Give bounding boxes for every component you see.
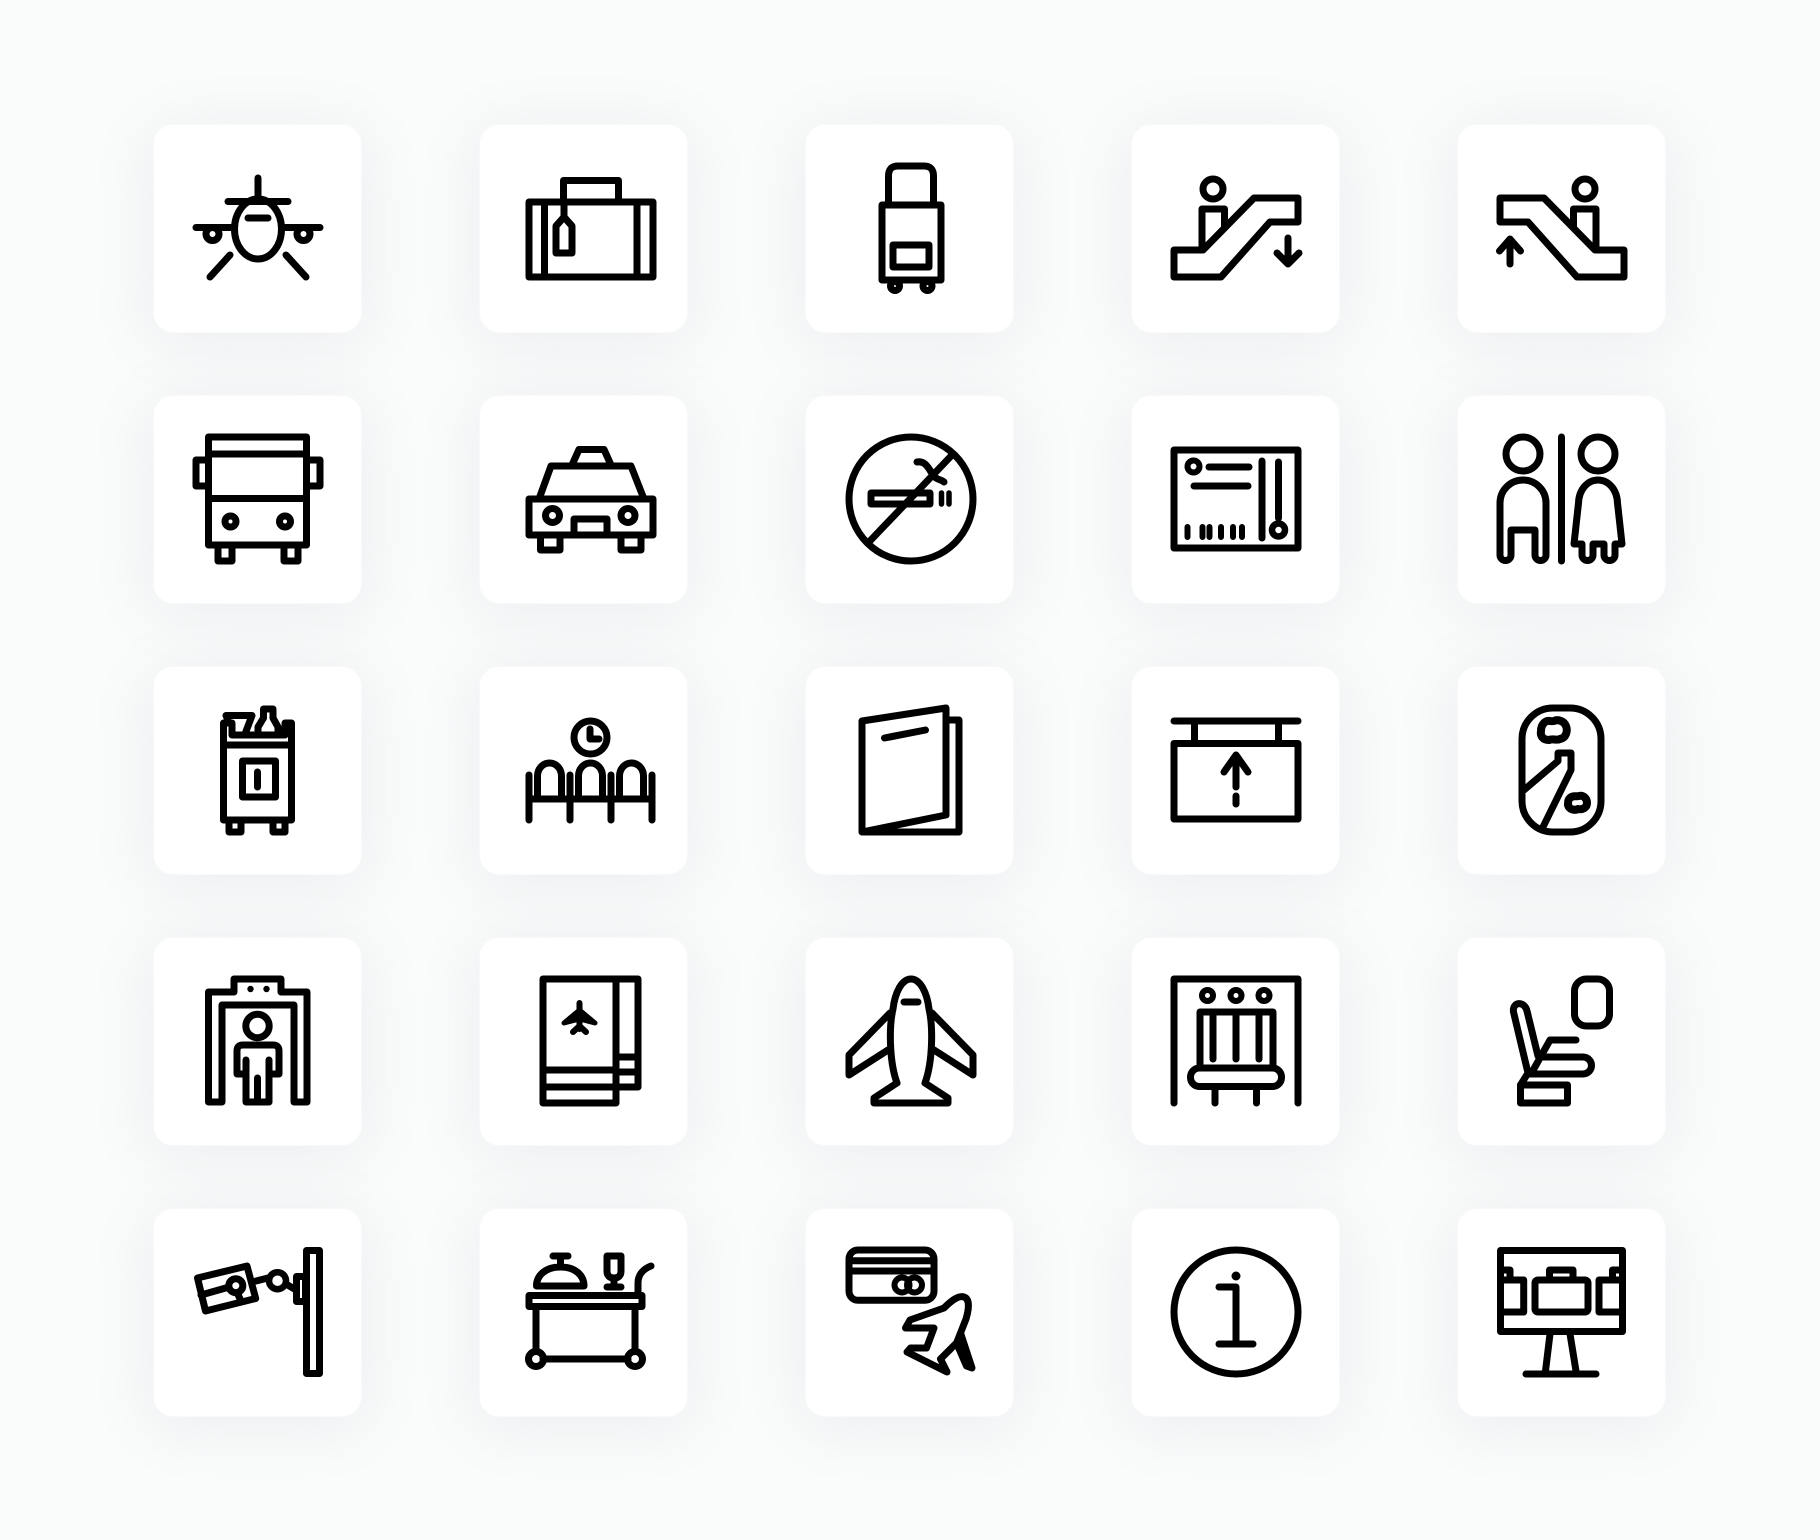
- icon: airplane top view: [846, 976, 976, 1106]
- card: trolley bag: [805, 124, 1014, 333]
- icon: credit card and plane: [846, 1246, 976, 1376]
- card: drinks cart: [153, 666, 362, 875]
- card: passport: [479, 937, 688, 1146]
- icon: plane seat: [1510, 976, 1613, 1106]
- icon: hanging direction sign: [1170, 718, 1302, 822]
- icon: baggage scanner: [1170, 976, 1302, 1106]
- card: waiting area: [479, 666, 688, 875]
- card: plane seat: [1457, 937, 1666, 1146]
- icon: passport: [540, 976, 642, 1106]
- card: plane window: [1457, 666, 1666, 875]
- card: brochure: [805, 666, 1014, 875]
- card: taxi: [479, 395, 688, 604]
- icon: escalator down: [1170, 176, 1302, 280]
- card: no smoking: [805, 395, 1014, 604]
- icon: restroom: [1496, 434, 1626, 564]
- icon: information: [1170, 1246, 1302, 1378]
- card: escalator down: [1131, 124, 1340, 333]
- icon: no smoking: [846, 434, 976, 564]
- card: baggage carousel monitor: [1457, 1208, 1666, 1417]
- icon: boarding pass: [1170, 446, 1302, 552]
- card: airplane top view: [805, 937, 1014, 1146]
- card: boarding pass: [1131, 395, 1340, 604]
- icon: waiting area: [526, 718, 656, 824]
- icon: plane window: [1518, 704, 1604, 836]
- card: bus: [153, 395, 362, 604]
- card: baggage scanner: [1131, 937, 1340, 1146]
- card: airplane front view: [153, 124, 362, 333]
- icon: security gate: [205, 976, 310, 1106]
- icon: security camera: [194, 1247, 323, 1377]
- icon: brochure: [858, 704, 962, 836]
- card: room service cart: [479, 1208, 688, 1417]
- card: suitcase with tag: [479, 124, 688, 333]
- icon: bus: [192, 434, 324, 564]
- card: security gate: [153, 937, 362, 1146]
- icon: taxi: [526, 446, 656, 554]
- icon: trolley bag: [878, 162, 944, 294]
- icon: airplane front view: [192, 174, 324, 280]
- card: information: [1131, 1208, 1340, 1417]
- card: escalator up: [1457, 124, 1666, 333]
- card: security camera: [153, 1208, 362, 1417]
- icon: suitcase with tag: [526, 177, 656, 280]
- icon: room service cart: [525, 1252, 654, 1370]
- card: hanging direction sign: [1131, 666, 1340, 875]
- card: restroom: [1457, 395, 1666, 604]
- icon: baggage carousel monitor: [1497, 1247, 1626, 1378]
- icon: drinks cart: [220, 706, 295, 836]
- card: credit card and plane ticket payment: [805, 1208, 1014, 1417]
- icon: escalator up: [1496, 176, 1628, 280]
